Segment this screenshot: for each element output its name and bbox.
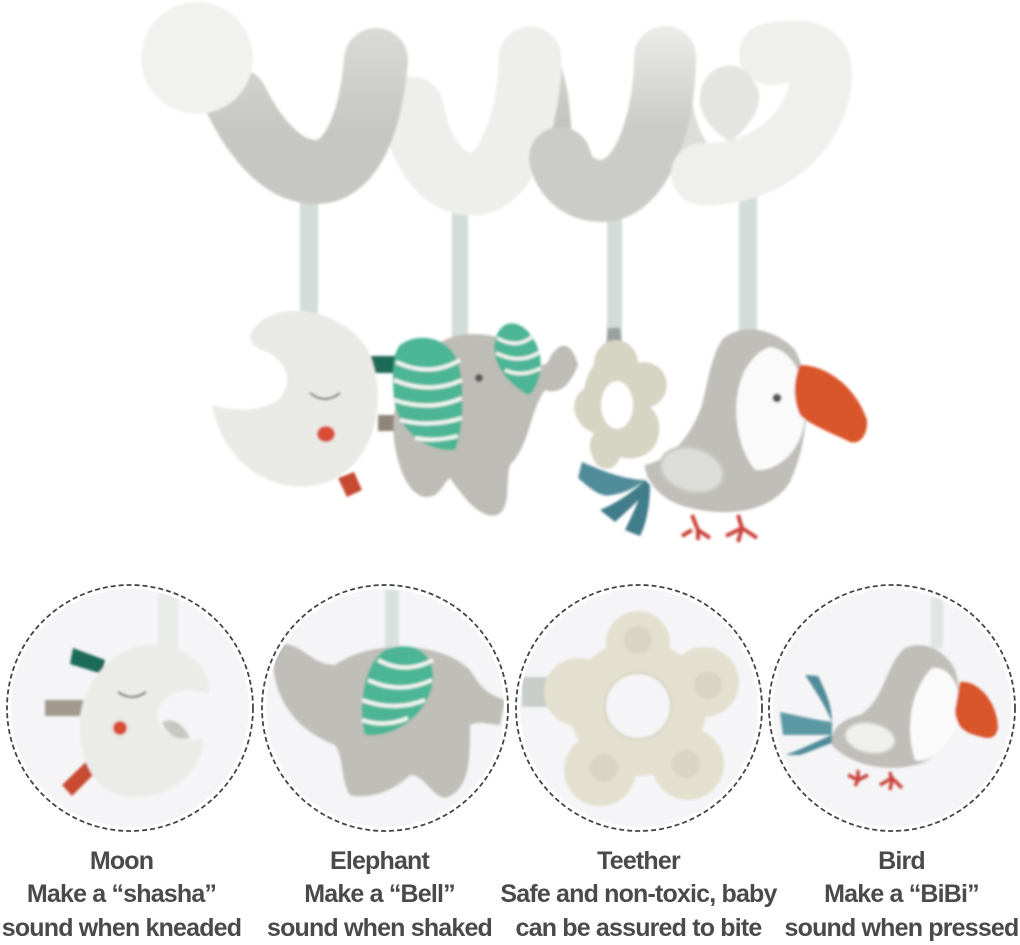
caption: moon: Moon — [90, 846, 153, 874]
caption: elephant: Elephant — [330, 846, 429, 874]
teether toy — [574, 328, 667, 469]
caption: bird: Make a “BiBi” — [824, 880, 979, 908]
caption: moon: sound when kneaded — [2, 914, 241, 942]
pompom ball — [141, 2, 253, 114]
caption: moon: Make a “shasha” — [27, 880, 216, 908]
gray coil 1 — [236, 60, 376, 172]
gray coil 3 — [560, 57, 665, 191]
caption: teether — [500, 846, 778, 942]
caption: teether: can be assured to bite — [516, 914, 761, 942]
back links between coils — [540, 70, 555, 165]
ribbon bow — [578, 462, 650, 536]
caption: bird: sound when pressed — [785, 914, 1018, 942]
caption: moon — [2, 846, 241, 942]
ribbons — [300, 195, 757, 345]
detail circle: moon — [7, 585, 253, 831]
white coil 4 with heart end — [702, 52, 821, 174]
caption: teether: Safe and non-toxic, baby — [500, 880, 777, 908]
bird toy — [645, 329, 867, 542]
detail circle: bird — [769, 585, 1015, 831]
caption: teether: Teether — [597, 846, 680, 874]
caption: bird — [785, 846, 1018, 942]
moon toy — [212, 311, 405, 497]
caption: bird: Bird — [878, 846, 925, 874]
caption: elephant: Make a “Bell” — [304, 880, 455, 908]
detail circle: elephant — [262, 585, 508, 831]
detail circle: teether — [516, 585, 762, 831]
elephant toy — [393, 323, 578, 516]
spiral plush hanger — [141, 2, 821, 345]
caption: elephant — [267, 846, 492, 942]
white coil 2 — [412, 58, 530, 184]
caption: elephant: sound when shaked — [267, 914, 492, 942]
